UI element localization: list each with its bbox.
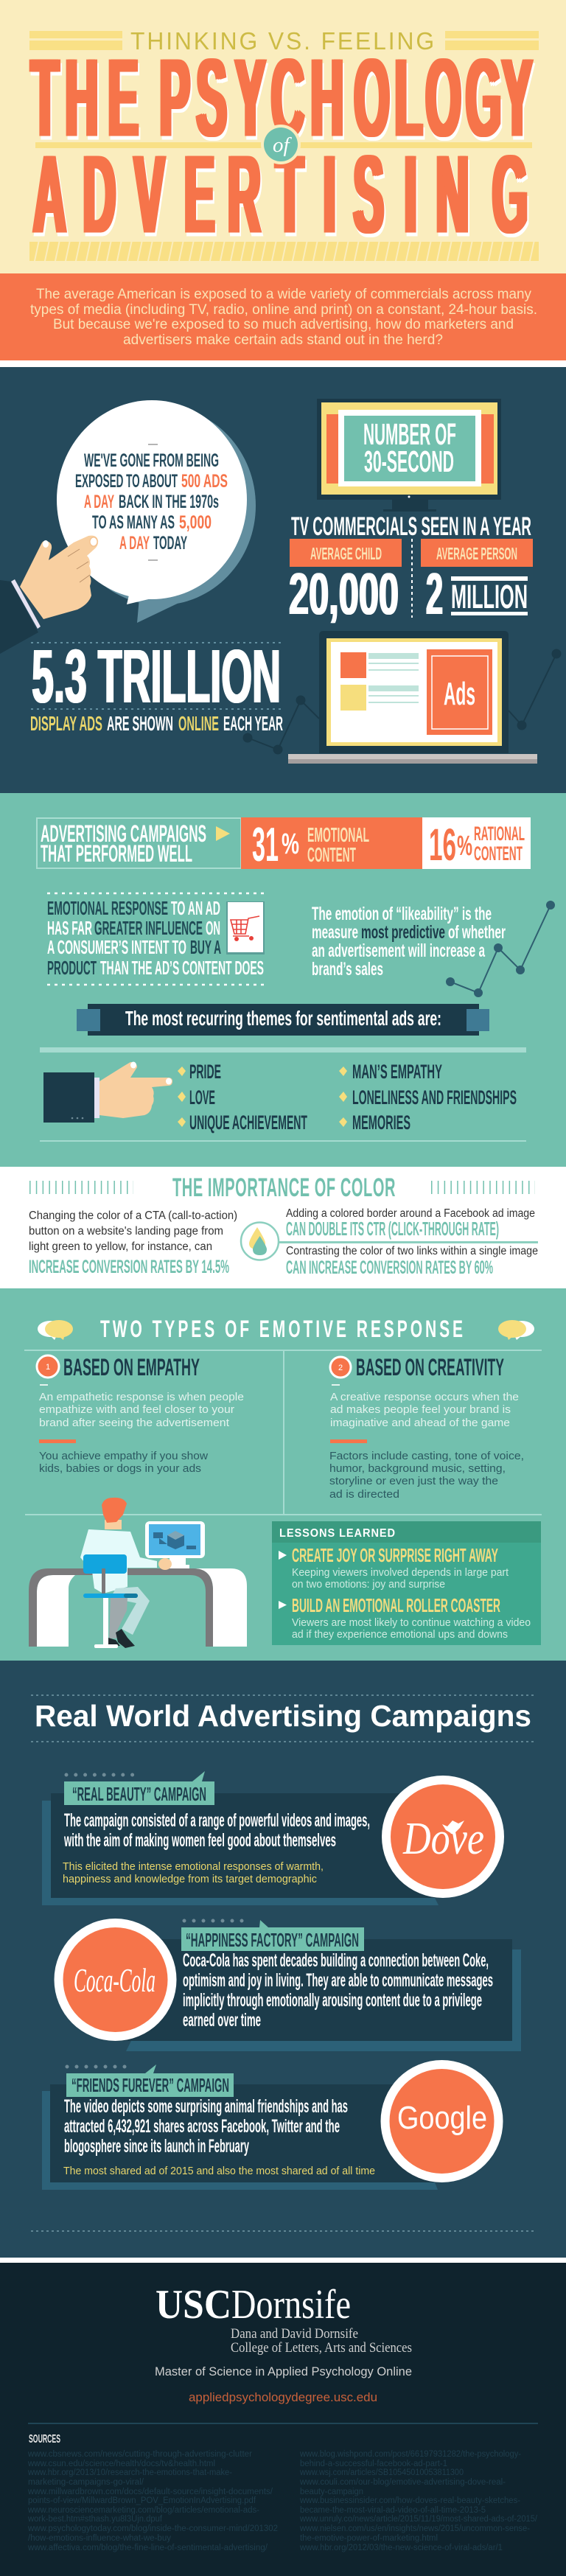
logo: usc dornsife: College of Letters, Arts and Sciences: [231, 2340, 412, 2356]
tv icon: NUMBER OF: [363, 417, 456, 451]
text: border and links: [286, 1207, 538, 1278]
column: based on creativity: humor, background music, setting,: [329, 1463, 506, 1475]
title: the psychology: THE PSYCHOLOGY: [29, 37, 530, 160]
logo: coca-cola: [55, 1919, 177, 2041]
text: cta color: light green to yellow, for instance, can: [29, 1240, 212, 1253]
sources list left: /how-emotions-influence-what-we-buy: [28, 2534, 171, 2543]
sources list left: www.neurosciencemarketing.com/blog/articles/emotional-ads-: [27, 2506, 259, 2515]
sources list left: work-best.htm#sthash.yu8l3Ujn.dpuf: [27, 2515, 163, 2524]
speech bubble: 500 ADS: [181, 471, 228, 492]
icon: pointing hand: [0, 536, 98, 654]
stat: 5.3 trillion: 5.3 TRILLION: [31, 634, 280, 719]
logo: coca-cola: Coca-Cola: [74, 1961, 156, 1999]
sources list left: www.millwardbrown.com/docs/default-source/insight-documents/: [27, 2488, 273, 2496]
icon: speech bubbles left: [38, 1320, 73, 1340]
sources list left: www.affectiva.com/blog/the-fine-line-of-sentimental-advertising/: [27, 2544, 268, 2552]
text: likeability: [312, 904, 506, 980]
badge: of: [261, 125, 301, 164]
campaign comparison bar: 16: [429, 820, 456, 870]
divider line: [35, 142, 532, 148]
sources list right: [299, 2450, 538, 2552]
text: likeability: of whether: [448, 922, 506, 943]
campaign: friends furever: “FRIENDS FUREVER” CAMPAIGN: [71, 2074, 229, 2096]
panel: emotional content: [0, 793, 566, 1167]
column: based on creativity: A creative response occurs when the: [330, 1392, 519, 1403]
campaign: friends furever: [42, 2060, 503, 2190]
campaign comparison bar: ADVERTISING CAMPAIGNS: [41, 820, 206, 847]
sources list left: marketing-campaigns-go-viral/: [28, 2478, 144, 2487]
text: emotional response: PRODUCT: [47, 957, 97, 979]
sources list left: www.cbsnews.com/news/cutting-through-advertising-clutter: [27, 2450, 252, 2459]
text: emotional response: GREATER INFLUENCE: [94, 917, 203, 939]
column: based on creativity: storyline or even just the way the: [329, 1476, 498, 1487]
campaign comparison bar: %: [457, 831, 472, 862]
list: themes left: PRIDE: [189, 1061, 221, 1083]
sources list right: behind-a-successful-facebook-ad-part-1: [300, 2460, 447, 2468]
text: likeability: most predictive: [361, 922, 445, 943]
sources list right: www.blog.wishpond.com/post/66197931282/the-psychology-: [299, 2450, 521, 2459]
panel: lessons learned: Viewers are most likely to continue watching a video: [292, 1617, 531, 1629]
speech bubble: 5,000: [179, 512, 212, 533]
logo: usc dornsife: Dana and David Dornsife: [231, 2326, 358, 2342]
panel: exposure statistics: [0, 367, 566, 793]
tv icon: [317, 399, 501, 512]
campaign: happiness factory: “HAPPINESS FACTORY” CAMPAIGN: [186, 1929, 359, 1951]
panel: emotive response: [0, 1288, 566, 1661]
caption: display ads: [30, 712, 283, 735]
sources list left: www.hbr.org/2013/10/research-the-emotions-that-make-: [27, 2468, 232, 2477]
campaign: happiness factory: earned over time: [183, 2010, 261, 2031]
text: cta color: INCREASE CONVERSION RATES BY 14.5%: [29, 1257, 229, 1277]
stat: average child: [288, 539, 402, 626]
column: based on creativity: imaginative and ahead of the game: [330, 1417, 510, 1429]
column: based on creativity: Factors include casting, tone of voice,: [329, 1451, 524, 1462]
campaign comparison bar: EMOTIONAL: [307, 823, 369, 846]
text: likeability: brand’s sales: [312, 959, 383, 980]
sources list right: www.nielsen.com/us/en/insights/news/2015/uncommon-sense-: [299, 2524, 530, 2533]
speech bubble: A DAY: [84, 492, 114, 512]
text: cta color: [29, 1210, 237, 1277]
sources list left: [27, 2450, 278, 2552]
column: based on creativity: [329, 1354, 524, 1501]
list: themes left: UNIQUE ACHIEVEMENT: [189, 1111, 307, 1134]
program name: Master of Science in Applied Psychology Online: [155, 2365, 412, 2378]
text: emotional response: THAN THE AD’S CONTENT DOES: [100, 957, 264, 979]
column: based on empathy: BASED ON EMPATHY: [63, 1354, 200, 1381]
speech bubble: TODAY: [153, 533, 187, 554]
logo: google: Google: [397, 2100, 487, 2136]
column: based on empathy: kids, babies or dogs in your ads: [39, 1463, 201, 1475]
logo: dove: Dove: [402, 1814, 484, 1864]
decorative bars beside subtitle: [29, 31, 539, 50]
logo: dove: [382, 1776, 504, 1898]
subtitle: THINKING VS. FEELING: [130, 27, 436, 55]
caption: display ads: DISPLAY ADS: [30, 712, 102, 735]
tv icon: 30-SECOND: [364, 444, 454, 478]
website: appliedpsychologydegree.usc.edu: [189, 2391, 377, 2404]
campaign comparison bar: 31: [252, 817, 279, 871]
stat: average person: [421, 539, 533, 626]
panel: lessons learned: LESSONS LEARNED: [279, 1527, 396, 1540]
panel: real world campaigns: [0, 1661, 566, 2258]
text: cta color: Changing the color of a CTA (call-to-action): [29, 1210, 237, 1222]
panel: intro: The average American is exposed to a wide variety of commercials across many: [36, 287, 531, 302]
logo: usc dornsife: Dornsife: [231, 2282, 351, 2328]
sources list left: www.csun.edu/science/health/docs/tv&health.html: [27, 2460, 215, 2468]
panel: lessons learned: ad if they experience emotional ups and downs: [292, 1629, 508, 1641]
panel: intro: [0, 273, 566, 360]
logo: usc dornsife: [156, 2282, 412, 2356]
campaign: real beauty: [42, 1771, 504, 1905]
sources list left: points-of-view/MillwardBrown_POV_EmotionInAdvertising.pdf: [28, 2496, 256, 2505]
text: emotional response: TO AN AD: [171, 897, 220, 919]
badge: of: of: [273, 133, 292, 157]
title: advertising: ADVERTISING: [31, 133, 525, 256]
panel: intro: types of media (including TV, radio, online and print) on a constant, 24-hour basis.: [30, 302, 537, 318]
icon: speech bubbles right: [498, 1320, 534, 1340]
text: emotional response: BUY A: [190, 936, 221, 958]
column: based on creativity: ad is directed: [329, 1489, 399, 1501]
sources list right: became-the-most-viral-ad-video-of-all-time-2013-5: [300, 2506, 486, 2515]
speech bubble: A DAY: [119, 533, 150, 554]
text: border and links: Contrasting the color of two links within a single image: [286, 1245, 538, 1257]
panel: intro: advertisers make certain ads stand out in the herd?: [123, 332, 443, 348]
heading: THE IMPORTANCE OF COLOR: [172, 1173, 396, 1202]
campaign: friends furever: The most shared ad of 2015 and also the most shared ad of all time: [63, 2165, 375, 2177]
text: emotional response: ON: [206, 917, 220, 939]
stat: average child: AVERAGE CHILD: [310, 544, 382, 563]
column: based on empathy: You achieve empathy if you show: [39, 1451, 209, 1462]
text: likeability: measure: [312, 922, 358, 943]
icon: color drops: [241, 1222, 279, 1260]
column: based on creativity: ad makes people feel your brand is: [330, 1404, 511, 1416]
list: themes right: MAN’S EMPATHY: [352, 1061, 442, 1083]
speech bubble: [57, 400, 256, 623]
panel: exposure statistics: EACH YEAR: [223, 712, 283, 735]
panel: lessons learned: on two emotions: joy and surprise: [292, 1579, 445, 1591]
speech bubble: EXPOSED TO ABOUT: [75, 471, 178, 492]
campaign: happiness factory: [55, 1919, 521, 2051]
heading: sources: SOURCES: [29, 2433, 60, 2446]
panel: footer: [0, 2263, 566, 2576]
speech bubble: WE'VE GONE FROM BEING: [84, 450, 219, 471]
text: border and links: Adding a colored border around a Facebook ad image: [286, 1207, 535, 1220]
text: cta color: button on a website's landing page from: [29, 1225, 223, 1238]
line chart: [447, 901, 554, 996]
sources list right: www.unruly.co/news/article/2015/11/19/most-shared-ads-of-2015/: [299, 2515, 538, 2524]
list: themes left: LOVE: [189, 1086, 215, 1109]
list: themes right: [339, 1061, 517, 1134]
panel: lessons learned: Keeping viewers involved depends in large part: [292, 1567, 509, 1579]
sources list right: www.couli.com/our-blog/emotive-advertising-dove-real-: [299, 2478, 506, 2487]
sources list right: www.businessinsider.com/how-doves-real-beauty-sketches-: [299, 2496, 520, 2505]
stat: average child: 20,000: [288, 561, 398, 626]
speech bubble: TO AS MANY AS: [92, 512, 175, 533]
sources list left: www.psychologytoday.com/blog/inside-the-consumer-mind/201302: [27, 2524, 278, 2533]
speech bubble: BACK IN THE 1970s: [119, 492, 219, 512]
chart line behind laptop: [243, 649, 561, 754]
column: based on empathy: [37, 1354, 244, 1475]
text: emotional response: HAS FAR: [47, 917, 92, 939]
panel: intro: But because we're exposed to so much advertising, how do marketers and: [53, 317, 514, 332]
campaign comparison bar: %: [282, 828, 299, 860]
icon: pointing hand 2: [43, 1061, 172, 1123]
caption: display ads: ONLINE: [178, 712, 219, 735]
column: based on empathy: 1: [46, 1363, 50, 1372]
campaign: real beauty: happiness and knowledge from its target demographic: [63, 1874, 317, 1885]
list: themes left: [178, 1061, 307, 1134]
stat: average person: 2: [425, 561, 442, 626]
heading: Real World Advertising Campaigns: [35, 1699, 531, 1733]
laptop icon: Ads: [444, 676, 475, 712]
sources list right: the-emotive-power-of-marketing.html: [300, 2534, 438, 2543]
text: emotional response: EMOTIONAL RESPONSE: [47, 897, 168, 919]
text: emotional response: A CONSUMER’S INTENT TO: [47, 936, 186, 958]
panel: lessons learned: [272, 1521, 541, 1645]
text: emotional response: [47, 897, 264, 979]
panel: importance of color: [0, 1167, 566, 1288]
campaign: real beauty: with the aim of making women feel good about themselves: [63, 1830, 336, 1851]
campaign: real beauty: “REAL BEAUTY” CAMPAIGN: [72, 1783, 206, 1805]
logo: usc dornsife: USC: [156, 2282, 231, 2328]
column: based on empathy: brand after seeing the advertisement: [39, 1417, 229, 1429]
illustration: person at desk: [29, 1498, 247, 1648]
sources list right: www.wsj.com/articles/SB10545010053811300: [299, 2468, 464, 2477]
campaign: real beauty: This elicited the intense emotional responses of warmth,: [63, 1861, 324, 1873]
sources list right: beauty-campaign: [300, 2488, 363, 2496]
striped band: [29, 242, 539, 261]
icon: shopping cart: [226, 901, 265, 954]
column: based on empathy: An empathetic response is when people: [39, 1392, 244, 1403]
column: based on empathy: empathize with and feel closer to your: [39, 1404, 234, 1416]
campaign: friends furever: blogosphere since its launch in February: [64, 2136, 249, 2157]
column: based on creativity: 2: [338, 1364, 343, 1372]
sources list right: www.hbr.org/2012/03/the-new-science-of-viral-ads/ar/1: [299, 2544, 503, 2552]
caption: display ads: ARE SHOWN: [107, 712, 173, 735]
laptop icon: [288, 631, 537, 764]
logo: google: [380, 2060, 503, 2182]
campaign comparison bar: CONTENT: [307, 843, 356, 866]
panel: header: [0, 0, 566, 273]
banner: recurring themes: [77, 1004, 489, 1036]
list: themes right: MEMORIES: [352, 1111, 410, 1134]
campaign comparison bar: THAT PERFORMED WELL: [41, 840, 192, 867]
campaign comparison bar: [37, 817, 531, 871]
